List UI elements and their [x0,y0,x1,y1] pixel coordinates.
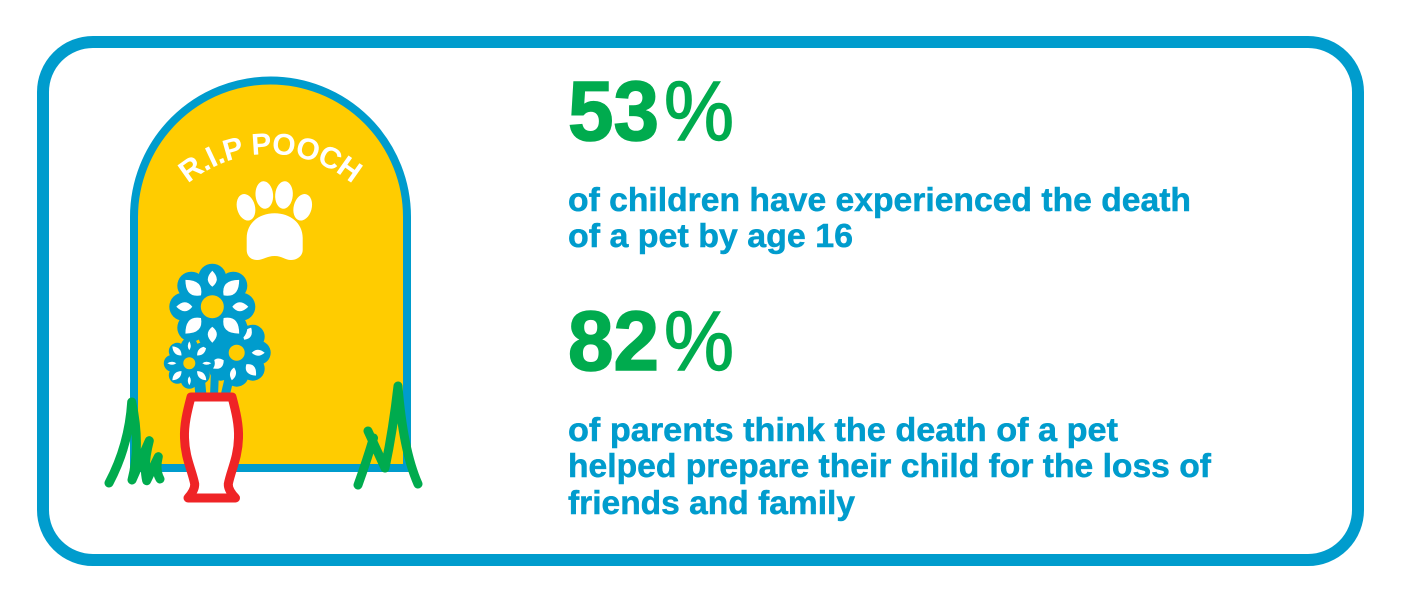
text: 53% description: of children have experienced the death [568,181,1191,218]
text: 82% description [568,411,1212,521]
statistic: 53%: 53% [568,64,734,158]
statistic: 82%: 82% [568,294,734,388]
icon: right grass [358,386,418,485]
icon: left grass [109,402,160,483]
text: 82% description: friends and family [568,484,856,521]
icon: right flower [203,319,271,387]
flower stems [199,370,230,396]
gravestone shape [134,80,407,468]
illustration: gravestone [104,76,422,502]
icon: red vase [184,397,239,498]
gravestone inscription: R.I.P POOCH [178,134,363,182]
icon: left flower [164,338,215,389]
text: 82% description: of parents think the death of a pet [568,411,1118,448]
text: 53% description [568,181,1191,254]
text: 53% description: of a pet by age 16 [568,217,853,254]
icon: paw print [234,180,315,260]
icon: large flower [169,264,255,350]
text: 82% description: helped prepare their child for the loss of [568,447,1212,484]
